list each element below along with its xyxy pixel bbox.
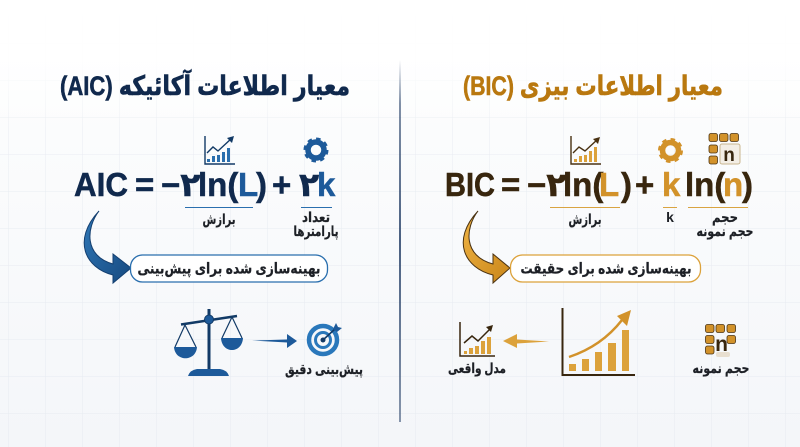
- formula: BIC: [445, 166, 753, 203]
- formula: AIC: +: [272, 166, 291, 203]
- formula: BIC: ): [621, 166, 632, 203]
- formula: BIC: −۲: [527, 166, 566, 203]
- label: accurate prediction: پیش‌بینی دقیق: [285, 361, 363, 378]
- callout: AIC optimised for prediction: [130, 255, 328, 282]
- formula: AIC: AIC: [74, 166, 128, 203]
- formula: AIC: ۲: [299, 166, 319, 203]
- underline labels: AIC terms: برازش: [202, 211, 236, 228]
- formula: BIC: ln(: [563, 166, 603, 203]
- formula: BIC: k: [662, 166, 681, 203]
- underline labels: BIC terms: [550, 208, 754, 240]
- callout: BIC optimised for truth: [510, 255, 700, 282]
- icon: BIC sample grid: n: [723, 145, 735, 166]
- underline labels: AIC terms: پارامترها: [294, 223, 338, 240]
- formula: AIC: −۲: [161, 166, 200, 203]
- callout: BIC optimised for truth: بهینه‌سازی شده برای حقیقت: [520, 260, 692, 278]
- panel: AIC side: [74, 136, 363, 378]
- callout: AIC optimised for prediction: بهینه‌سازی شده برای پیش‌بینی: [138, 260, 320, 278]
- panel: BIC side: [445, 134, 754, 377]
- icon: large growth chart: [562, 308, 635, 375]
- icon: real model chart: [460, 322, 495, 356]
- formula: AIC: [74, 166, 336, 203]
- underline labels: AIC terms: [185, 208, 338, 240]
- underline labels: AIC terms: تعداد: [302, 209, 330, 225]
- underline labels: BIC terms: حجم نمونه: [696, 223, 754, 240]
- formula: AIC: L: [238, 166, 258, 203]
- formula: BIC: ): [742, 166, 753, 203]
- arrow: BIC curved arrow: [463, 211, 510, 283]
- formula: BIC: L: [599, 166, 619, 203]
- icon: AIC gear: [305, 139, 327, 161]
- icon: sample size grid: [706, 324, 736, 357]
- icon: BIC fit chart: [571, 136, 601, 164]
- formula: AIC: ln(: [198, 166, 238, 203]
- arrow: scale to target: [252, 334, 297, 348]
- title: AIC: معیار اطلاعات آکائیکه (AIC): [60, 69, 350, 102]
- arrow: AIC curved arrow: [84, 211, 131, 283]
- formula: BIC: +: [635, 166, 654, 203]
- formula: AIC: =: [135, 166, 154, 203]
- formula: AIC: k: [317, 166, 336, 203]
- formula: BIC: ln(: [685, 166, 725, 203]
- icon: AIC fit chart: [205, 136, 235, 164]
- icon: sample size grid: n: [715, 333, 728, 356]
- label: sample size: حجم نمونه: [692, 360, 750, 377]
- formula: AIC: ): [256, 166, 267, 203]
- underline labels: BIC terms: حجم: [712, 209, 738, 225]
- formula: BIC: BIC: [445, 166, 495, 203]
- underline labels: BIC terms: k: [666, 209, 674, 225]
- title: BIC: معیار اطلاعات بیزی (BIC): [463, 71, 723, 102]
- formula: BIC: n: [723, 166, 743, 203]
- icon: BIC gear: [660, 140, 682, 162]
- label: real model: مدل واقعی: [448, 360, 506, 377]
- icon: balance scale: [174, 309, 243, 376]
- formula: BIC: =: [501, 166, 520, 203]
- icon: target: [309, 323, 342, 354]
- arrow: chart to model: [503, 334, 549, 348]
- underline labels: BIC terms: برازش: [568, 211, 602, 228]
- icon: BIC sample grid: [709, 134, 740, 166]
